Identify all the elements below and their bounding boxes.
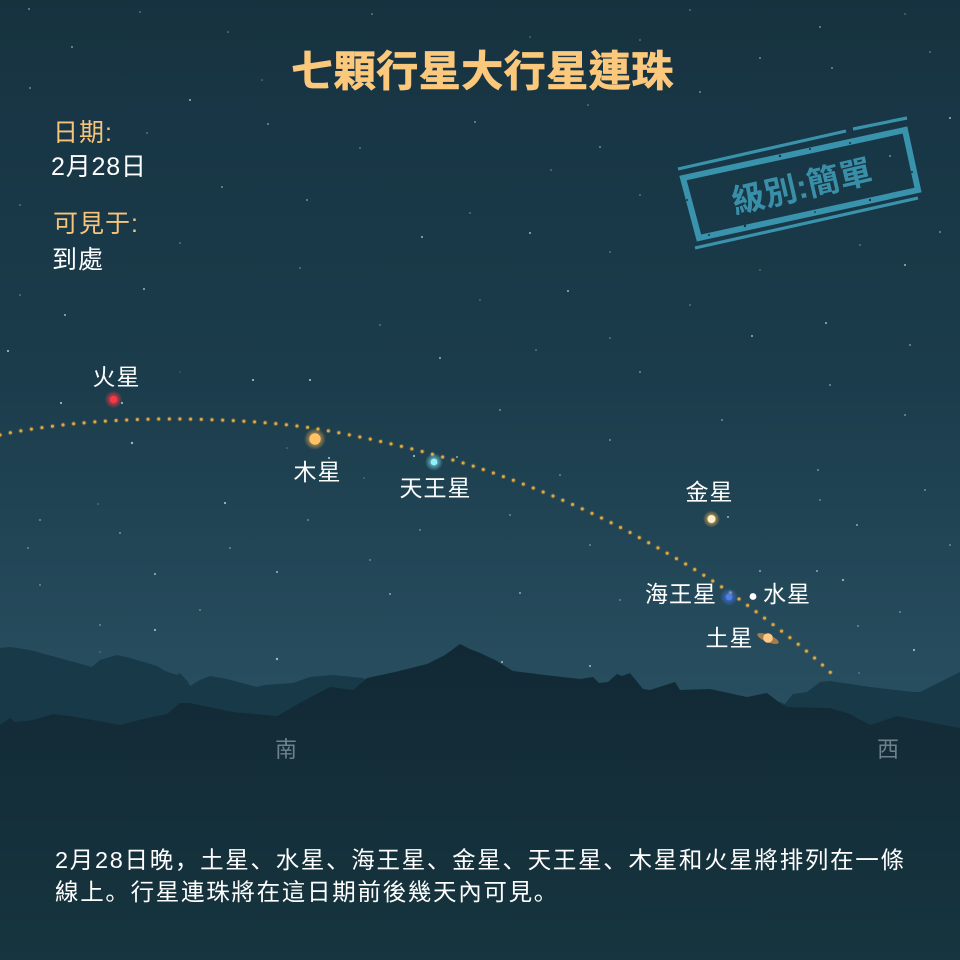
date heading: 日期: <box>53 119 113 147</box>
label: Mars: 火星 <box>92 364 140 390</box>
date value: 2月28日 <box>51 153 147 181</box>
planet: Mars <box>92 364 140 408</box>
planet: Saturn <box>706 625 780 651</box>
planet: Neptune <box>645 581 738 607</box>
date block <box>51 119 147 181</box>
label: Neptune: 海王星 <box>645 581 717 607</box>
visibility block <box>52 210 139 274</box>
description line 1: 2月28日晚，土星、水星、海王星、金星、天王星、木星和火星將排列在一條 <box>55 847 906 873</box>
visibility value: 到處 <box>52 246 104 274</box>
planet: Venus <box>686 479 734 528</box>
stamp text: 級別:簡單 <box>728 152 876 221</box>
label: Uranus: 天王星 <box>400 475 472 501</box>
planet: Jupiter <box>294 428 342 485</box>
label: Venus: 金星 <box>686 479 734 505</box>
compass: west: 西 <box>877 737 899 762</box>
planet: Mercury <box>750 581 811 607</box>
compass: south: 南 <box>275 737 297 762</box>
stamp top double line <box>678 118 907 169</box>
description text <box>55 847 906 905</box>
planet: Uranus <box>400 453 472 501</box>
night sky background <box>0 0 960 760</box>
label: Jupiter: 木星 <box>294 459 342 485</box>
foreground mountain range <box>0 644 960 960</box>
description line 2: 線上。行星連珠將在這日期前後幾天內可見。 <box>55 879 559 905</box>
label: Saturn: 土星 <box>706 625 754 651</box>
stamp bottom double line <box>695 198 918 248</box>
stamp outer frame <box>683 130 918 238</box>
label: Mercury: 水星 <box>763 581 811 607</box>
star field <box>7 8 951 674</box>
difficulty stamp <box>678 118 918 248</box>
title: 七顆行星大行星連珠 <box>291 48 674 95</box>
visibility heading: 可見于: <box>53 210 139 238</box>
ecliptic dotted line <box>0 419 831 673</box>
stamp wear specks <box>686 142 913 236</box>
distant mountain range <box>0 647 960 760</box>
